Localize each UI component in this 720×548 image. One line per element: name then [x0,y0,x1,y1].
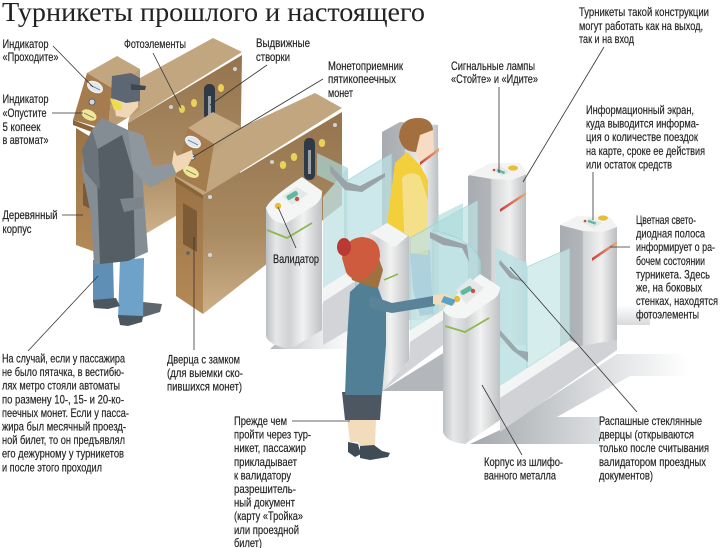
right face [203,112,342,314]
label: indicator coin: в автомат» [2,133,49,147]
green stripe [267,223,312,238]
glass row two [382,200,481,391]
label: coin acceptor: пятикопеечных [328,72,396,86]
glass row three [495,247,617,432]
label: before passing: разрешитель- [234,482,296,496]
label: sliding flaps [210,36,310,105]
label: before passing: ный документ [234,496,295,510]
cap [111,73,140,103]
hand [172,150,193,173]
hair [350,248,383,288]
label: door with lock: пившихся монет) [167,380,242,394]
label: info screen: или остаток средств [586,157,672,171]
label: coin acceptor [193,59,404,157]
pillar D [355,223,409,391]
back slot and photocells [204,84,215,120]
back left body [76,128,112,258]
back side face [128,55,242,233]
label: door with lock [167,237,243,394]
label: coin acceptor: монет [328,86,353,100]
label: metal body: ванного металла [484,469,556,483]
label: no coin note: лях метро стояли автоматы [2,379,120,393]
back head top [87,56,140,88]
label: LED strip [610,213,718,322]
hat [342,237,380,280]
label: no coin note: по размену 10-, 15- и 20-ко- [2,392,124,406]
label: glass doors [510,267,709,482]
label: before passing: никет, пассажир [234,441,306,455]
old wooden turnstile: back [73,38,242,258]
label: before passing: или проездной [234,523,299,537]
label: info screen [586,103,705,220]
label: indicator coin [2,92,83,147]
far pillar [382,122,439,320]
label: photocells [124,37,186,108]
label: no coin note: пеечных монет. Если у пасса- [2,406,129,420]
slot and photocells [304,138,315,180]
arm [128,130,177,188]
label: wooden body: Деревянный [2,208,58,222]
label: door with lock: (для выемки ско- [167,366,243,380]
label: signal lamps: Сигнальные лампы [451,59,535,73]
hand and card [433,294,456,305]
coat [82,118,148,264]
label: glass doors: документов) [599,468,653,482]
skirt [342,392,382,420]
glass row one [317,153,400,345]
old wooden turnstile: front [175,93,342,314]
panel [266,177,322,224]
head [188,112,240,144]
woman at the validator [337,237,456,460]
beam top [175,93,342,195]
label: LED strip: фотоэлементы [636,308,699,322]
label: indicator go: Индикатор [2,37,49,51]
back head left face [73,73,112,130]
arm [369,296,435,313]
label: indicator go [2,37,93,87]
label: photocells: Фотоэлементы [124,37,186,51]
dress [345,281,386,395]
label: both directions [523,5,709,182]
label: LED strip: Цветная свето- [636,213,696,227]
man at the old turnstile [82,73,193,326]
label: wooden body [2,208,83,236]
label: before passing [234,414,350,548]
label: wooden body: корпус [2,222,32,236]
label: sliding flaps: створки [256,50,290,64]
label: no coin note: не было пятачка, в вестибю- [2,365,124,379]
label: sliding flaps: Выдвижные [256,36,310,50]
label: before passing: к валидатору [234,468,291,482]
label: no coin note: его дежурному у турникетов [2,447,124,461]
floor shadows [130,300,688,444]
label: no coin note: и после этого проходил [2,460,102,474]
back beam top [128,38,242,123]
trousers and boots [93,260,114,302]
label: no coin note: жира был месячный проезд- [2,420,126,434]
label: LED strip: же, на боковых [636,280,702,294]
label: coin acceptor: Монетоприемник [328,59,404,73]
label: indicator coin: «Опустите [2,106,47,120]
label: before passing: (карту «Тройка» [234,509,303,523]
label: door with lock: Дверца с замком [167,352,240,366]
label: glass doors: дверцы (открываются [599,428,694,442]
label: signal lamps [451,59,538,173]
front pillar E [443,274,500,444]
label: both directions: так и на вход [579,32,634,46]
label: no coin note: ной билет, то он предъявлял [2,433,125,447]
label: before passing: пройти через тур- [234,428,311,442]
door with lock [183,203,197,252]
pillar C [560,215,617,354]
label: signal lamps: «Стойте» и «Идите» [451,72,538,86]
legs and shoes [347,418,376,447]
label: indicator coin: Индикатор [2,92,49,106]
person in yellow vest [385,118,439,316]
label: validator [273,207,319,266]
label: no coin note [2,276,129,474]
label: no coin note: На случай, если у пассажира [2,352,125,366]
face and hair [112,88,138,118]
label: metal body [482,385,563,483]
left face [176,182,203,314]
label: metal body: Корпус из шлифо- [484,455,563,469]
label: validator: Валидатор [273,252,319,266]
validator pillar [266,177,322,349]
label: before passing: прикладывает [234,455,297,469]
pillar B [468,163,527,345]
label: indicator go: «Проходите» [2,50,59,64]
label: indicator coin: 5 копеек [2,120,41,134]
label: before passing: Прежде чем [234,414,287,428]
